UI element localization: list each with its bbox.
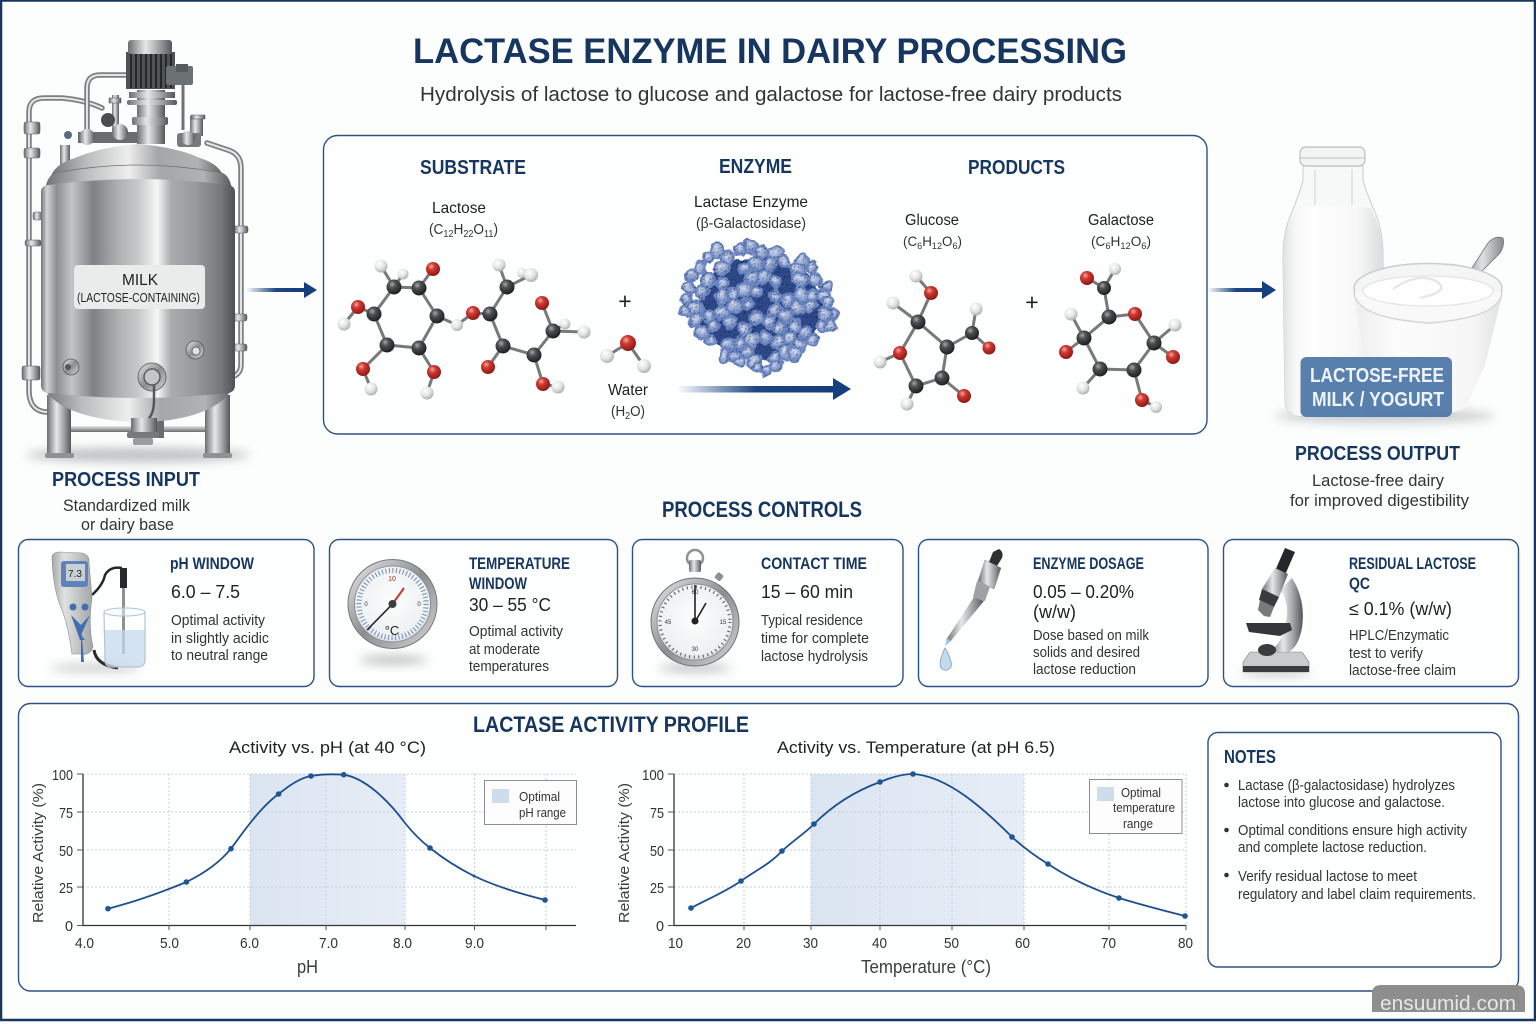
card: residual lactose QC: QC [1349,574,1370,593]
plus sign: + [618,288,632,314]
chart: activity vs pH: 25 [59,880,73,897]
card: temperature window: 30 – 55 °C [469,595,551,615]
galactose label: O [1131,233,1141,249]
galactose label: 12 [1120,241,1131,252]
note 1 [1224,778,1455,811]
glucose label: 6 [952,241,958,252]
glucose label [903,212,962,252]
icon: temperature gauge [348,560,437,664]
lactose label: O [473,221,484,238]
illustration: stainless steel milk tank [22,40,250,462]
card: pH window: in slightly acidic [171,631,269,647]
card: residual lactose QC: RESIDUAL LACTOSE [1349,554,1476,573]
tank dome [50,144,224,180]
molecule: lactose [338,258,590,400]
tank top valves [60,95,205,165]
icon: stopwatch: 15 [720,620,727,626]
note 2: and complete lactose reduction. [1238,840,1427,856]
illustration: milk bottle and yogurt [1275,147,1504,423]
yogurt glass [1354,264,1502,412]
note 3: regulatory and label claim requirements. [1238,887,1476,903]
chart: activity vs temperature: 25 [650,880,664,897]
glucose label: H [922,233,932,249]
card: contact time [632,540,903,686]
arrow: reaction to output [1208,281,1276,299]
tank motor [126,40,193,89]
product label [1300,357,1452,417]
icon: pH meter: 7.3 [68,569,82,580]
icon: pipette with droplet [940,549,1003,670]
tank bottom dome [42,385,234,422]
card: pH window: 6.0 – 7.5 [171,582,240,602]
card: temperature window [330,540,618,686]
lactose label: Lactose [432,200,486,217]
card: temperature window: Optimal activity [469,624,564,640]
arrow: reaction direction [677,378,851,400]
chart: activity vs pH: 4.0 [75,935,94,952]
process input caption: Standardized milk [63,496,190,515]
glucose label: 6 [917,241,922,252]
heading: enzyme: ENZYME [719,156,792,178]
water label: Water [608,382,649,399]
lactose label: 22 [463,229,474,240]
chart: activity vs pH: 100 [52,767,73,784]
process input caption: or dairy base [81,515,174,534]
card: residual lactose QC: HPLC/Enzymatic [1349,628,1449,644]
icon: stopwatch: 45 [665,620,672,626]
chart: activity vs temperature [617,738,1193,977]
card: enzyme dosage: solids and desired [1033,645,1140,661]
heading: substrate: SUBSTRATE [420,157,526,179]
glucose label: Glucose [905,212,959,229]
chart: activity vs pH: 0 [65,918,73,935]
water label: O) [630,403,645,420]
legend: optimal pH range: pH range [519,806,566,820]
legend: optimal temperature range: temperature [1113,801,1175,815]
tank body [41,179,235,398]
chart: activity vs pH: 8.0 [393,935,412,952]
tank pipework [22,75,248,412]
process input caption [52,469,200,534]
card: enzyme dosage: (w/w) [1033,602,1076,622]
watermark: ensuumid.com [1380,993,1516,1015]
molecule: glucose [874,270,996,410]
galactose label: Galactose [1088,212,1154,229]
note 2: Optimal conditions ensure high activity [1238,823,1468,839]
chart: activity vs temperature: 20 [736,935,751,952]
chart: activity vs temperature: 75 [650,805,664,822]
enzyme label: Lactase Enzyme [694,194,808,211]
chart: activity vs pH: Relative Activity (%) [31,783,47,923]
panel: notes [1208,732,1501,967]
tank label: MILK [122,272,158,289]
tank label: (LACTOSE-CONTAINING) [77,290,200,305]
glucose label: 12 [932,241,942,252]
lactose label: ) [493,221,498,238]
galactose label: 6 [1141,241,1146,252]
card: enzyme dosage [918,540,1208,686]
panel: notes: NOTES [1224,747,1276,767]
lactose label: 11 [484,229,494,240]
card: pH window: to neutral range [171,648,268,664]
enzyme label [694,194,808,232]
chart: activity vs temperature: 30 [803,935,818,952]
tank label [74,265,205,309]
process input caption: PROCESS INPUT [52,469,200,491]
card: temperature window: TEMPERATURE [469,554,570,573]
card: temperature window: WINDOW [469,574,528,593]
chart: activity vs pH: 9.0 [465,935,484,952]
icon: microscope [1240,548,1312,676]
card: enzyme dosage: Dose based on milk [1033,628,1150,644]
legend: optimal temperature range [1090,780,1182,834]
card: pH window: Optimal activity [171,613,266,629]
chart: activity vs temperature: 10 [668,935,683,952]
galactose label [1088,212,1154,252]
note 3: Verify residual lactose to meet [1238,869,1417,885]
icon: temperature gauge: 0 [417,602,421,608]
process output caption: for improved digestibility [1290,491,1469,510]
panel: lactase activity profile [18,704,1518,991]
tank shaft [127,90,177,144]
arrow: input to reaction [246,282,317,298]
product label: LACTOSE-FREE [1310,365,1444,387]
watermark [1372,985,1525,1015]
icon: temperature gauge: 10 [388,576,396,583]
chart: activity vs temperature: 100 [642,767,664,784]
icon: stopwatch: 60 [692,590,699,596]
icon: stopwatch [651,550,739,672]
enzyme protein illustration [680,239,839,376]
chart: activity vs pH: Activity vs. pH (at 40 °C) [229,738,426,757]
chart: activity vs pH [31,738,576,977]
legend: optimal pH range: Optimal [519,790,560,804]
card: temperature window: temperatures [469,659,549,675]
chart: activity vs temperature: 50 [944,935,959,952]
lactose label: 12 [443,229,454,240]
chart: activity vs pH: 50 [59,843,73,860]
milk bottle [1283,147,1383,416]
icon: temperature gauge: 0 [364,602,368,608]
product label: MILK / YOGURT [1312,389,1444,411]
icon: pH meter [50,552,145,672]
chart: activity vs temperature: Temperature (°C) [861,957,991,977]
heading: process controls: PROCESS CONTROLS [662,497,862,522]
legend: optimal pH range [484,780,576,824]
process output caption [1290,443,1469,510]
card: contact time: Typical residence [761,613,863,629]
card: contact time: 15 – 60 min [761,582,853,602]
card: residual lactose QC: test to verify [1349,646,1424,662]
chart: activity vs pH: 75 [59,805,73,822]
chart: activity vs pH: 5.0 [160,935,179,952]
heading: activity profile: LACTASE ACTIVITY PROFILE [473,712,749,737]
card: temperature window: at moderate [469,642,540,658]
tank nozzles [63,341,204,445]
legend: optimal temperature range: Optimal [1121,786,1161,800]
card: enzyme dosage: lactose reduction [1033,662,1136,678]
galactose label: 6 [1105,241,1111,252]
water label [608,382,649,422]
icon: stopwatch: 30 [692,647,699,653]
chart: activity vs pH: 6.0 [240,935,259,952]
yogurt spoon [1461,237,1504,288]
note 1: Lactase (β-galactosidase) hydrolyzes [1238,778,1455,794]
panel: enzymatic reaction [324,136,1207,434]
card: pH window: pH WINDOW [170,554,255,573]
chart: activity vs temperature: 0 [656,918,664,935]
tank legs and crossbars [45,395,232,458]
note 1: lactose into glucose and galactose. [1238,795,1445,811]
chart: activity vs temperature: 40 [872,935,887,952]
water label: (H [611,403,627,420]
icon: temperature gauge: °C [385,623,399,638]
card: contact time: time for complete [761,631,869,647]
card: enzyme dosage: 0.05 – 0.20% [1033,582,1134,602]
card: contact time: CONTACT TIME [761,554,867,573]
galactose label: ) [1146,233,1151,249]
chart: activity vs pH: pH [297,957,318,977]
glucose label: (C [903,233,918,249]
card: residual lactose QC [1224,540,1518,686]
subtitle: Hydrolysis of lactose to glucose and galactose for lactose-free dairy products [420,83,1122,106]
chart: activity vs temperature: 50 [650,843,664,860]
heading: products: PRODUCTS [968,157,1065,179]
glucose label: ) [958,233,962,249]
galactose label: H [1111,233,1120,249]
molecule: water [600,335,651,373]
process output caption: Lactose-free dairy [1312,471,1444,490]
note 3 [1224,869,1476,903]
chart: activity vs temperature: 60 [1015,935,1030,952]
legend: optimal temperature range: range [1123,817,1153,831]
water label: 2 [625,411,630,422]
chart: activity vs pH: 7.0 [319,935,338,952]
glucose label: O [942,233,953,249]
lactose label: H [453,221,463,238]
title: LACTASE ENZYME IN DAIRY PROCESSING [413,32,1127,71]
molecule: galactose [1059,263,1182,413]
process output caption: PROCESS OUTPUT [1295,443,1460,465]
chart: activity vs temperature: Relative Activity (%) [617,783,633,923]
card: residual lactose QC: ≤ 0.1% (w/w) [1349,599,1452,619]
card: enzyme dosage: ENZYME DOSAGE [1033,554,1144,573]
chart: activity vs temperature: 70 [1101,935,1116,952]
plus sign: + [1025,289,1039,315]
galactose label: (C [1091,233,1106,249]
chart: activity vs temperature: Activity vs. Temperature (at pH 6.5) [777,738,1055,757]
chart: activity vs temperature: 80 [1178,935,1193,952]
lactose label: (C [429,221,445,238]
card: pH window [18,540,314,686]
enzyme label: (β-Galactosidase) [696,215,806,232]
card: contact time: lactose hydrolysis [761,649,868,665]
card: residual lactose QC: lactose-free claim [1349,663,1456,679]
lactose label [429,200,498,240]
note 2 [1224,823,1468,856]
